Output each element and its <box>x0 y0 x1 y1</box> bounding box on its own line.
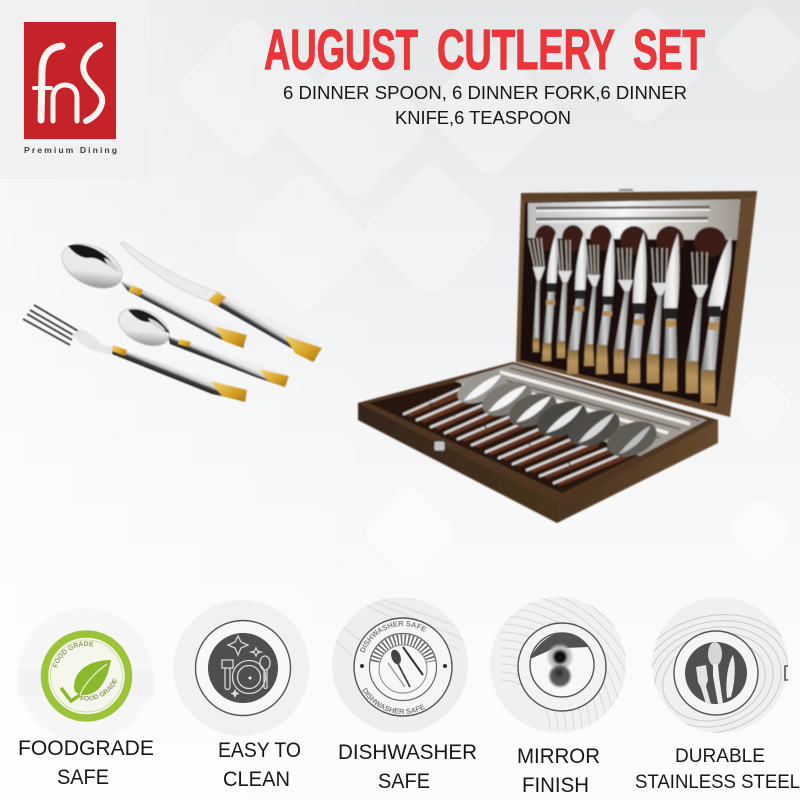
feature: easy to clean <box>174 600 310 791</box>
lid recess arches <box>535 225 726 257</box>
icon: fork spoon knife <box>674 631 758 715</box>
knives in lid <box>542 230 731 403</box>
icon: food grade seal: FOOD GRADE <box>80 678 118 701</box>
subtitle: KNIFE,6 TEASPOON <box>395 107 571 128</box>
label: SAFE <box>57 765 109 789</box>
badge disc <box>332 597 468 733</box>
silver lid plate <box>528 199 741 240</box>
subtitle: 6 DINNER SPOON, 6 DINNER FORK,6 DINNER <box>283 82 687 103</box>
logo tagline: Premium Dining <box>24 145 117 155</box>
icon: polished ball <box>518 623 606 711</box>
dinner spoon <box>55 235 247 348</box>
lid clasp <box>619 189 633 191</box>
title: SET <box>633 18 705 82</box>
label: FINISH <box>522 773 589 797</box>
teaspoon <box>113 301 289 387</box>
feature: mirror finish <box>490 597 626 792</box>
title <box>264 18 705 82</box>
base silver plate <box>455 364 707 456</box>
feature: foodgrade safe <box>18 630 154 789</box>
label <box>635 745 800 793</box>
label: SAFE <box>378 769 430 793</box>
box lid <box>516 190 757 417</box>
badge backdrop <box>18 608 154 742</box>
label <box>18 736 154 789</box>
logo panel <box>0 0 149 179</box>
stray edge mark <box>785 666 788 680</box>
spoon bowls in base <box>453 366 662 464</box>
badge disc <box>490 597 626 733</box>
badge disc <box>174 600 310 736</box>
label <box>338 740 477 793</box>
box clasp <box>434 441 445 451</box>
label: CLEAN <box>223 768 290 791</box>
feature: dishwasher safe <box>332 597 477 793</box>
icon: dishwasher seal: DISHWASHER SAFE <box>360 620 427 653</box>
knife <box>120 242 322 362</box>
label <box>517 744 600 797</box>
label: FOODGRADE <box>18 736 154 760</box>
icon: dishwasher seal: DISHWASHER SAFE <box>362 688 426 714</box>
logo monogram <box>34 45 102 121</box>
logo red square <box>24 22 116 139</box>
product photo: cutlery box <box>358 190 757 523</box>
spoon and fork handles in base <box>404 388 626 483</box>
label: DISHWASHER <box>338 740 477 764</box>
subtitle <box>283 82 687 128</box>
feature: durable stainless steel <box>636 597 800 788</box>
label <box>218 739 301 791</box>
label: MIRROR <box>517 744 600 768</box>
label: DURABLE <box>675 745 765 767</box>
icon: food grade seal <box>40 630 132 722</box>
title: AUGUST <box>264 18 418 82</box>
title: CUTLERY <box>437 18 615 82</box>
icon: dishwasher seal <box>353 617 453 717</box>
icon: plate and sparkle <box>196 620 290 716</box>
cutlery photo: four pieces <box>23 235 322 402</box>
badge disc <box>652 597 788 733</box>
fork <box>23 305 247 402</box>
label: EASY TO <box>218 739 301 762</box>
icon: food grade seal: FOOD GRADE <box>52 641 94 668</box>
box base <box>358 362 718 523</box>
forks in lid <box>529 238 708 393</box>
